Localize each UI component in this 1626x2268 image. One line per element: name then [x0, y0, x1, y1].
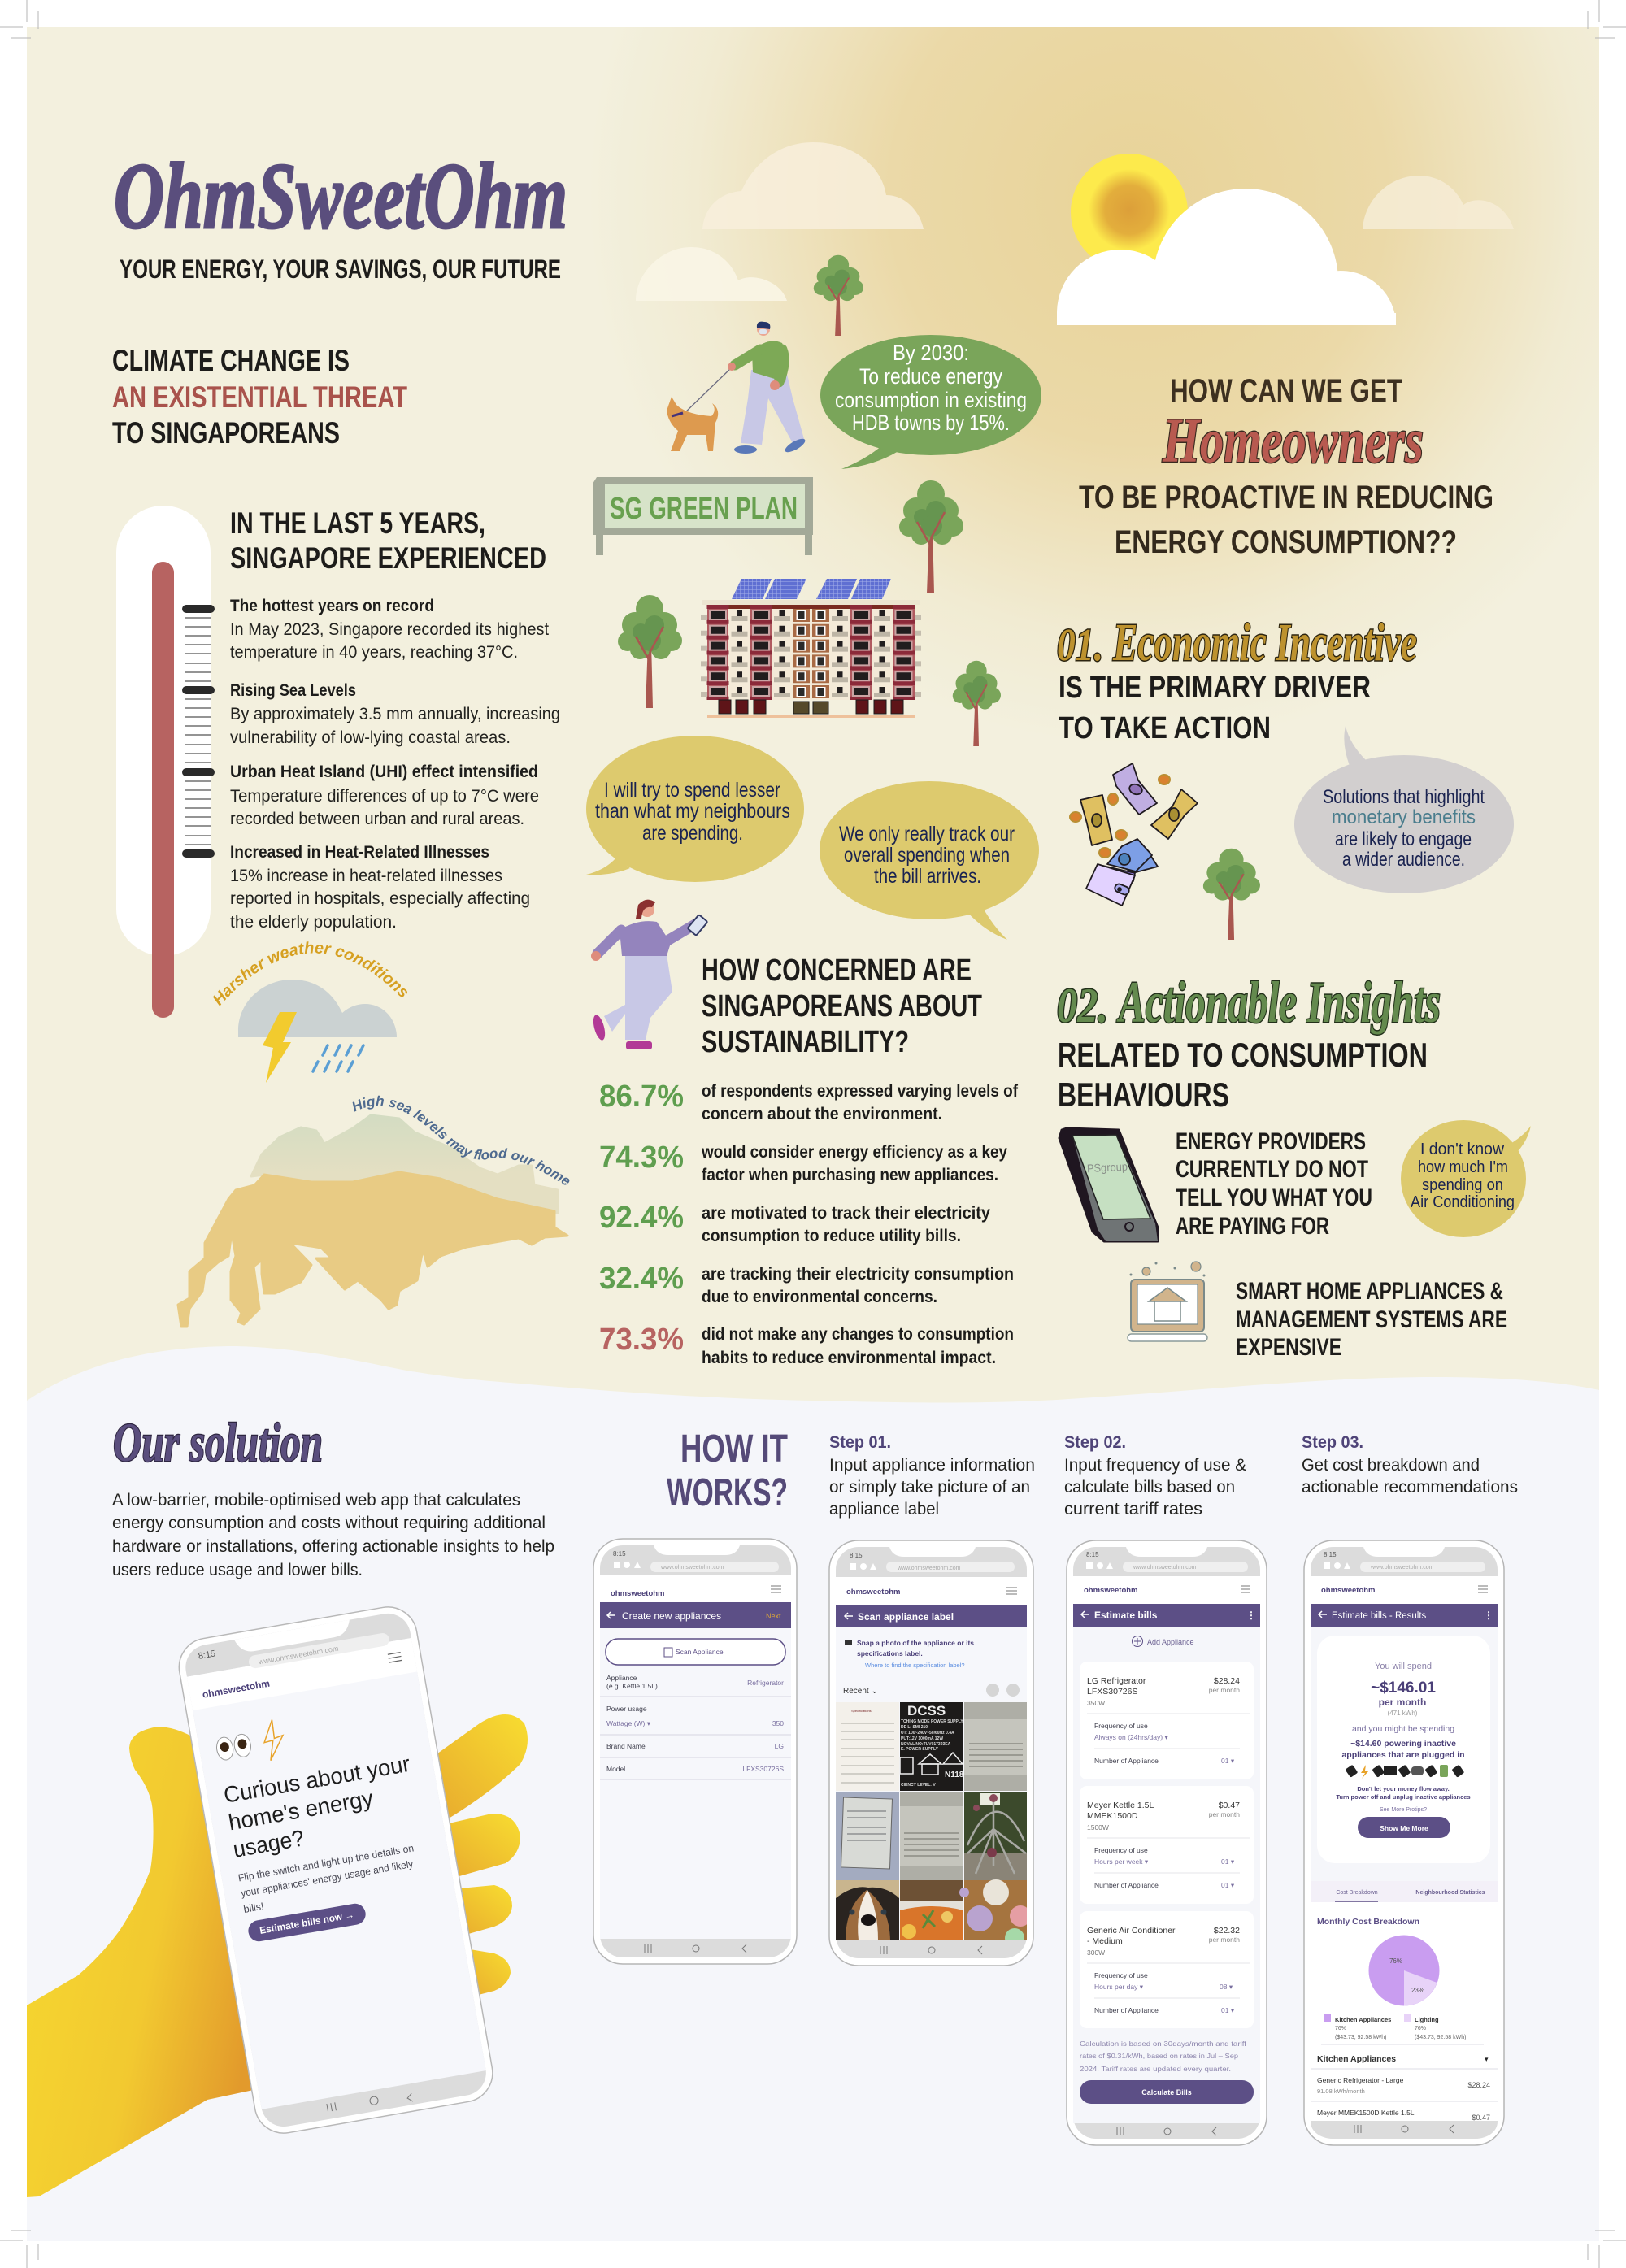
legend: ($43.73, 92.58 kWh)	[1415, 2035, 1466, 2040]
phone: create new appliances: Power usage	[606, 1705, 647, 1713]
card: air conditioner: Number of Appliance	[1094, 2006, 1159, 2014]
legend: Kitchen Appliances	[1335, 2016, 1391, 2023]
phone: estimate bills: ohmsweetohm	[1084, 1586, 1138, 1595]
stat: 92.4%	[599, 1201, 990, 1245]
heading: homeowners question: Homeowners	[1162, 405, 1424, 476]
card: refrigerator: 350W	[1087, 1699, 1105, 1707]
stat: 73.3%: did not make any changes to consumption	[702, 1325, 1014, 1344]
appliance list: ▾	[1485, 2055, 1489, 2063]
phone: results: www.ohmsweetohm.com	[1370, 1565, 1434, 1571]
card: refrigerator: 01 ▾	[1221, 1757, 1235, 1765]
step 02 text: current tariff rates	[1064, 1500, 1202, 1519]
speech bubble: spend lesser: than what my neighbours	[595, 800, 790, 823]
text: smart home: EXPENSIVE	[1236, 1334, 1341, 1361]
appliance list: Kitchen Appliances	[1317, 2054, 1396, 2064]
results card: See More Protips?	[1380, 1807, 1427, 1813]
phone: scan appliance label: Where to find the specification label?	[865, 1662, 965, 1669]
top chrome text	[195, 1618, 403, 1701]
text: energy providers: TELL YOU WHAT YOU	[1176, 1184, 1372, 1211]
step 01 text: appliance label	[829, 1500, 939, 1519]
speech bubble: By 2030: To reduce energy	[859, 364, 1002, 389]
heading: actionable insights	[1057, 970, 1441, 1114]
text: urban heat island	[230, 763, 539, 828]
stat: 74.3%: factor when purchasing new appliances.	[702, 1166, 998, 1184]
phone: create new appliances: 350	[772, 1719, 784, 1727]
phone: create new appliances: LG	[775, 1742, 784, 1750]
headline: Curious about your	[222, 1751, 412, 1808]
step 03 text: actionable recommendations	[1302, 1478, 1518, 1497]
appliance list: $28.24	[1467, 2081, 1490, 2089]
appliance list: Generic Refrigerator - Large	[1317, 2076, 1404, 2084]
map of Singapore	[178, 1115, 567, 1327]
results card: Show Me More	[1380, 1824, 1428, 1832]
speech bubble: monetary benefits: are likely to engage	[1335, 828, 1472, 850]
results card: ~$14.60 powering inactive	[1350, 1739, 1456, 1749]
speech bubble: spend lesser: are spending.	[642, 822, 743, 845]
illustration: HDB building	[702, 579, 920, 718]
tree	[953, 661, 1001, 746]
photo grid	[836, 1702, 1031, 1948]
heading: climate change: AN EXISTENTIAL THREAT	[112, 380, 407, 414]
tabs: Neighbourhood Statistics	[1415, 1890, 1485, 1896]
description: your appliances' energy usage and likely	[240, 1858, 415, 1899]
step 02 text	[1064, 1433, 1246, 1519]
phone: estimate bills: ⋮	[1246, 1610, 1256, 1621]
legend: ($43.73, 92.58 kWh)	[1335, 2035, 1386, 2040]
heading: how concerned: SUSTAINABILITY?	[702, 1025, 909, 1059]
text: heat illnesses: the elderly population.	[230, 913, 397, 932]
phone: results	[1304, 1540, 1504, 2145]
sign: SG green plan: SG GREEN PLAN	[610, 492, 798, 526]
text: sea levels: By approximately 3.5 mm annually, increasing	[230, 705, 560, 723]
pie chart	[1369, 1935, 1439, 2006]
heading: last 5 years	[230, 506, 546, 575]
pie chart: 76%	[1389, 1957, 1402, 1965]
speech bubble: By 2030: By 2030:	[893, 341, 969, 365]
results card: and you might be spending	[1352, 1724, 1454, 1734]
legend: 76%	[1335, 2026, 1346, 2031]
results card: ~$146.01	[1371, 1679, 1436, 1697]
text: smart home	[1236, 1278, 1507, 1361]
card: refrigerator: LFXS30726S	[1087, 1687, 1137, 1697]
phone: create new appliances: Refrigerator	[747, 1679, 784, 1687]
stat: 73.3%	[599, 1323, 1014, 1367]
stat: 32.4%: are tracking their electricity consumption	[702, 1265, 1014, 1284]
top chrome text: www.ohmsweetohm.com	[257, 1645, 339, 1666]
card: air conditioner: - Medium	[1087, 1936, 1123, 1946]
stat: 86.7%: concern about the environment.	[702, 1105, 942, 1123]
tabs: Cost Breakdown	[1336, 1890, 1378, 1896]
phone: create new appliances: (e.g. Kettle 1.5L)	[606, 1682, 658, 1690]
phone: estimate bills: Add Appliance	[1147, 1638, 1194, 1646]
phone: estimate bills: Estimate bills	[1094, 1610, 1158, 1621]
stat: 32.4%: due to environmental concerns.	[702, 1288, 937, 1306]
phone: scan appliance label: Snap a photo of the appliance or its	[857, 1639, 974, 1647]
speech bubble: air conditioning: I don't know	[1420, 1141, 1505, 1158]
phone: create new appliances: Scan Appliance	[676, 1648, 724, 1656]
heading: how it works: WORKS?	[667, 1471, 788, 1514]
headline	[222, 1751, 421, 1862]
step 02 text: calculate bills based on	[1064, 1478, 1235, 1497]
tree	[899, 480, 963, 593]
text: sea levels: vulnerability of low-lying coastal areas.	[230, 728, 511, 747]
stat: 92.4%: consumption to reduce utility bills.	[702, 1227, 961, 1245]
card: air conditioner: 01 ▾	[1221, 2006, 1235, 2014]
phone: create new appliances: Appliance	[606, 1674, 637, 1682]
heading: climate change: TO SINGAPOREANS	[112, 416, 340, 450]
photo grid: UT: 100~240V~50/60Hz 0.4A	[901, 1731, 954, 1736]
stat: 32.4%: 32.4%	[599, 1262, 684, 1296]
stat: 73.3%: habits to reduce environmental impact.	[702, 1349, 996, 1367]
text: hottest years	[230, 597, 549, 662]
speech bubble: air conditioning: spending on	[1422, 1176, 1503, 1194]
card: refrigerator: $28.24	[1214, 1676, 1240, 1686]
text: urban heat island: Temperature differences of up to 7°C were	[230, 787, 539, 806]
heading: homeowners question: ENERGY CONSUMPTION??	[1115, 524, 1457, 560]
text: energy providers	[1176, 1128, 1372, 1240]
step 01 text: or simply take picture of an	[829, 1478, 1030, 1497]
heading: economic incentive: 01.	[1057, 620, 1103, 671]
phone: scan appliance label: www.ohmsweetohm.com	[897, 1566, 961, 1571]
button	[246, 1902, 367, 1943]
illustration: woman with phone	[591, 900, 707, 1049]
text: energy providers: ENERGY PROVIDERS	[1176, 1128, 1366, 1155]
stat: 73.3%: 73.3%	[599, 1323, 684, 1357]
phone: create new appliances	[593, 1539, 797, 1964]
photo grid: DE L: SMI 210	[901, 1725, 928, 1730]
photo grid: NOVAL NO:TUV017393EA	[901, 1742, 951, 1747]
results card	[1317, 1636, 1490, 1863]
legend: 76%	[1415, 2026, 1426, 2031]
phone: create new appliances: Model	[606, 1765, 625, 1773]
text: heat illnesses: 15% increase in heat-related illnesses	[230, 867, 502, 885]
card: refrigerator: LG Refrigerator	[1087, 1676, 1146, 1686]
speech bubble: spend lesser: I will try to spend lesser	[604, 779, 780, 802]
card: air conditioner: $22.32	[1214, 1926, 1240, 1936]
tariff note	[1080, 2040, 1247, 2073]
text: solution description: hardware or installations, offering actionable insights to help	[112, 1537, 554, 1556]
heading: our solution: Our solution	[113, 1411, 323, 1473]
step 01 text	[829, 1433, 1035, 1519]
pie chart: 23%	[1411, 1987, 1424, 1994]
card: air conditioner: Hours per day ▾	[1094, 1983, 1144, 1991]
speech bubble: air conditioning	[1401, 1120, 1531, 1237]
phone: results: ohmsweetohm	[1321, 1586, 1376, 1595]
text: heat illnesses: reported in hospitals, especially affecting	[230, 889, 530, 908]
text: sea levels: Rising Sea Levels	[230, 681, 356, 700]
text: urban heat island: Urban Heat Island (UHI) effect intensified	[230, 763, 538, 781]
text: solution description: energy consumption and costs without requiring additional	[112, 1514, 546, 1532]
top chrome text: 8:15	[198, 1649, 216, 1662]
card: kettle: Number of Appliance	[1094, 1881, 1159, 1889]
tariff note: Calculation is based on 30days/month and tariff	[1080, 2040, 1247, 2048]
step 03 text	[1302, 1433, 1518, 1497]
photo grid: DCSS	[907, 1703, 946, 1718]
stat: 74.3%	[599, 1141, 1007, 1184]
button: calculate bills	[1080, 2080, 1254, 2104]
stat: 86.7%: of respondents expressed varying levels of	[702, 1082, 1019, 1101]
icon: smartphone: PSgroup	[1087, 1160, 1128, 1175]
phone: scan appliance label: 8:15	[850, 1552, 863, 1559]
sky glow	[569, 27, 1599, 791]
heading: actionable insights: BEHAVIOURS	[1058, 1075, 1229, 1114]
phone: create new appliances: Wattage (W) ▾	[606, 1719, 651, 1727]
heading: economic incentive: TO TAKE ACTION	[1059, 711, 1271, 745]
results card: Don't let your money flow away.	[1357, 1785, 1450, 1792]
text: heat illnesses: Increased in Heat-Related Illnesses	[230, 843, 489, 862]
speech bubble: monetary benefits: Solutions that highlight	[1323, 786, 1485, 808]
card: kettle: MMEK1500D	[1087, 1811, 1138, 1821]
tariff note: rates of $0.31/kWh, based on rates in Jul – Sep	[1080, 2052, 1238, 2060]
card: kettle: per month	[1209, 1810, 1240, 1818]
photo grid: PUT:12V 1000mA 12W	[901, 1736, 943, 1741]
phone: results: Estimate bills - Results	[1332, 1611, 1427, 1621]
results card: per month	[1379, 1697, 1426, 1708]
appliance list: Meyer MMEK1500D Kettle 1.5L	[1317, 2109, 1415, 2117]
phone: create new appliances: Create new appliances	[622, 1610, 721, 1622]
stat: 74.3%: would consider energy efficiency as a key	[701, 1143, 1007, 1162]
speech bubble: monetary benefits: a wider audience.	[1342, 849, 1465, 871]
photo grid: N118	[945, 1771, 964, 1779]
heading: how concerned	[702, 954, 982, 1059]
cloud: middle	[702, 142, 924, 229]
speech bubble: By 2030	[820, 335, 1041, 469]
phone: scan appliance label	[829, 1540, 1033, 1966]
appliance list	[1317, 2054, 1490, 2122]
phone: large landing page	[175, 1602, 497, 2138]
card: kettle: $0.47	[1219, 1801, 1240, 1810]
heading: how concerned: SINGAPOREANS ABOUT	[702, 989, 982, 1023]
text: hottest years: temperature in 40 years, reaching 37°C.	[230, 643, 518, 662]
tabs	[1311, 1881, 1498, 1902]
step 01 text: Input appliance information	[829, 1456, 1035, 1475]
phone: create new appliances: Next	[766, 1612, 781, 1620]
stat: 86.7%: 86.7%	[599, 1080, 684, 1114]
phone: create new appliances: ohmsweetohm	[611, 1589, 665, 1598]
step 02 text: Input frequency of use &	[1064, 1456, 1246, 1475]
heading: how it works	[667, 1427, 788, 1514]
card: refrigerator: per month	[1209, 1686, 1240, 1694]
title: OhmSweetOhm	[114, 145, 567, 249]
speech bubble: spend lesser	[586, 736, 804, 882]
heading: economic incentive	[1057, 613, 1417, 745]
text: smart home: SMART HOME APPLIANCES &	[1236, 1278, 1503, 1305]
button: Estimate bills now →	[259, 1909, 355, 1936]
sign: SG green plan	[593, 477, 813, 555]
photo grid: CIENCY LEVEL: V	[901, 1783, 936, 1788]
heading: actionable insights: 02.	[1057, 979, 1108, 1032]
tree	[1203, 849, 1260, 940]
card: air conditioner: Frequency of use	[1094, 1971, 1148, 1979]
stat: 92.4%: are motivated to track their electricity	[702, 1204, 990, 1223]
bottom panel with wave	[27, 1346, 1599, 2241]
photo grid: E. POWER SUPPLY	[901, 1747, 939, 1752]
speech bubble: track spending: the bill arrives.	[874, 865, 981, 888]
icon: eyes and bolt	[214, 1718, 287, 1769]
heading: actionable insights: Actionable Insights	[1116, 970, 1441, 1035]
card: kettle: 1500W	[1087, 1823, 1109, 1831]
stat: 92.4%: 92.4%	[599, 1201, 684, 1235]
card: kettle: 01 ▾	[1221, 1881, 1235, 1889]
heading: climate change: CLIMATE CHANGE IS	[112, 344, 350, 377]
icon: money and wallet	[1070, 763, 1198, 906]
heading: homeowners question	[1079, 373, 1493, 560]
card: kettle: Meyer Kettle 1.5L	[1087, 1801, 1154, 1810]
stat: 86.7%	[599, 1080, 1019, 1123]
heading: last 5 years: SINGAPORE EXPERIENCED	[230, 541, 546, 575]
appliance list: $0.47	[1472, 2114, 1490, 2122]
illustration: yellow hand	[27, 1714, 528, 2197]
speech bubble: By 2030: consumption in existing	[835, 388, 1027, 412]
photo grid: TCHING MODE POWER SUPPLY	[901, 1719, 963, 1724]
card: refrigerator	[1087, 1676, 1240, 1765]
tariff note: 2024. Tariff rates are updated every quarter.	[1080, 2065, 1231, 2073]
stat: 32.4%	[599, 1262, 1014, 1306]
icon: sun	[1071, 154, 1188, 271]
heading: homeowners question: HOW CAN WE GET	[1170, 373, 1402, 409]
card: air conditioner: 08 ▾	[1220, 1983, 1233, 1991]
phone: estimate bills: www.ohmsweetohm.com	[1133, 1565, 1197, 1571]
step 01 text: Step 01.	[829, 1433, 891, 1452]
heading: how concerned: HOW CONCERNED ARE	[702, 954, 972, 988]
speech bubble: track spending: overall spending when	[844, 844, 1010, 867]
card: kettle: Frequency of use	[1094, 1846, 1148, 1854]
speech bubble: monetary benefits	[1294, 726, 1514, 893]
phone: scan appliance label: Recent ⌄	[843, 1687, 878, 1696]
curved label: harsher weather: Harsher weather conditions	[213, 941, 407, 1006]
cloud: big white	[1057, 189, 1396, 325]
card: kettle: 01 ▾	[1221, 1857, 1235, 1866]
cloud: right	[1363, 176, 1514, 229]
icon: smart home laptop	[1128, 1262, 1207, 1341]
phone: results: 8:15	[1324, 1551, 1337, 1558]
phone: scan appliance label: specifications label.	[857, 1649, 923, 1658]
text: solution description: users reduce usage and lower bills.	[112, 1561, 363, 1579]
curved label: high sea levels: High sea levels may flood our home	[353, 1096, 569, 1185]
step 03 text: Step 03.	[1302, 1433, 1363, 1452]
card: air conditioner: per month	[1209, 1936, 1240, 1944]
heading: how it works: HOW IT	[680, 1427, 788, 1471]
text: solution description: A low-barrier, mobile-optimised web app that calculates	[112, 1491, 520, 1510]
text: hottest years: In May 2023, Singapore recorded its highest	[230, 620, 549, 639]
icon: smartphone	[1059, 1128, 1158, 1241]
phone: results: Monthly Cost Breakdown	[1317, 1917, 1419, 1927]
speech bubble: monetary benefits: monetary benefits	[1332, 806, 1476, 828]
text: hottest years: The hottest years on record	[230, 597, 434, 615]
text: sea levels	[230, 681, 560, 747]
text: energy providers: CURRENTLY DO NOT	[1176, 1156, 1368, 1183]
subtitle: YOUR ENERGY, YOUR SAVINGS, OUR FUTURE	[120, 254, 561, 284]
phone: results: ⋮	[1484, 1610, 1493, 1621]
photo grid: Specifications	[851, 1709, 872, 1713]
phone: create new appliances: 8:15	[613, 1550, 626, 1558]
description	[237, 1842, 420, 1915]
card: air conditioner: 300W	[1087, 1949, 1105, 1957]
stat: 74.3%: 74.3%	[599, 1141, 684, 1175]
speech bubble: By 2030: HDB towns by 15%.	[852, 411, 1010, 435]
card: refrigerator: Frequency of use	[1094, 1722, 1148, 1730]
phone: scan appliance label: Scan appliance label	[858, 1611, 954, 1623]
phone: estimate bills	[1067, 1540, 1267, 2145]
card: air conditioner: Generic Air Conditioner	[1087, 1926, 1176, 1936]
results card: (471 kWh)	[1388, 1710, 1418, 1717]
phone: estimate bills: 8:15	[1086, 1551, 1099, 1558]
description: Flip the switch and light up the details on	[237, 1842, 415, 1883]
tree	[814, 255, 863, 336]
results card: Turn power off and unplug inactive appliances	[1336, 1793, 1471, 1801]
legend: Lighting	[1415, 2016, 1439, 2023]
illustration: man walking dog	[667, 322, 807, 454]
heading: homeowners question: TO BE PROACTIVE IN REDUCING	[1079, 480, 1493, 515]
step 02 text: Step 02.	[1064, 1433, 1126, 1452]
text: solution description	[112, 1491, 554, 1579]
cream top panel	[27, 27, 1599, 1425]
results card: appliances that are plugged in	[1341, 1750, 1465, 1760]
top chrome text: ohmsweetohm	[202, 1678, 271, 1701]
speech bubble: air conditioning: how much I'm	[1418, 1158, 1508, 1176]
tree	[618, 595, 682, 708]
text: energy providers: ARE PAYING FOR	[1176, 1213, 1329, 1240]
phone: scan appliance label: ohmsweetohm	[846, 1588, 901, 1597]
phone: create new appliances: Brand Name	[606, 1742, 646, 1750]
card: refrigerator: Number of Appliance	[1094, 1757, 1159, 1765]
appliance list: 91.08 kWh/month	[1317, 2088, 1365, 2095]
card: kettle: Hours per week ▾	[1094, 1857, 1149, 1866]
heading: last 5 years: IN THE LAST 5 YEARS,	[230, 506, 485, 540]
button: calculate bills: Calculate Bills	[1141, 2088, 1192, 2096]
text: urban heat island: recorded between urban and rural areas.	[230, 810, 524, 828]
card: air conditioner	[1087, 1926, 1240, 2014]
phone: create new appliances: LFXS30726S	[742, 1765, 784, 1773]
phone: create new appliances: www.ohmsweetohm.com	[660, 1565, 724, 1571]
speech bubble: track spending: We only really track our	[839, 823, 1015, 845]
speech bubble: track spending	[820, 781, 1039, 940]
step 03 text: Get cost breakdown and	[1302, 1456, 1480, 1475]
headline: home's energy	[227, 1785, 375, 1835]
results card: You will spend	[1375, 1662, 1432, 1671]
description: bills!	[242, 1901, 265, 1915]
legend	[1324, 2014, 1466, 2040]
speech bubble: air conditioning: Air Conditioning	[1411, 1193, 1515, 1211]
heading: economic incentive: Economic Incentive	[1112, 613, 1417, 672]
headline: usage?	[231, 1825, 306, 1862]
text: smart home: MANAGEMENT SYSTEMS ARE	[1236, 1306, 1507, 1333]
card: refrigerator: Always on (24hrs/day) ▾	[1094, 1733, 1168, 1741]
heading: climate change	[112, 344, 407, 450]
text: heat illnesses	[230, 843, 530, 932]
cloud: small left	[636, 247, 787, 301]
heading: actionable insights: RELATED TO CONSUMPTION	[1058, 1036, 1428, 1074]
heading: economic incentive: IS THE PRIMARY DRIVER	[1059, 671, 1371, 705]
icon: storm cloud	[238, 980, 397, 1083]
thermometer	[116, 506, 215, 1018]
card: kettle	[1087, 1801, 1240, 1889]
